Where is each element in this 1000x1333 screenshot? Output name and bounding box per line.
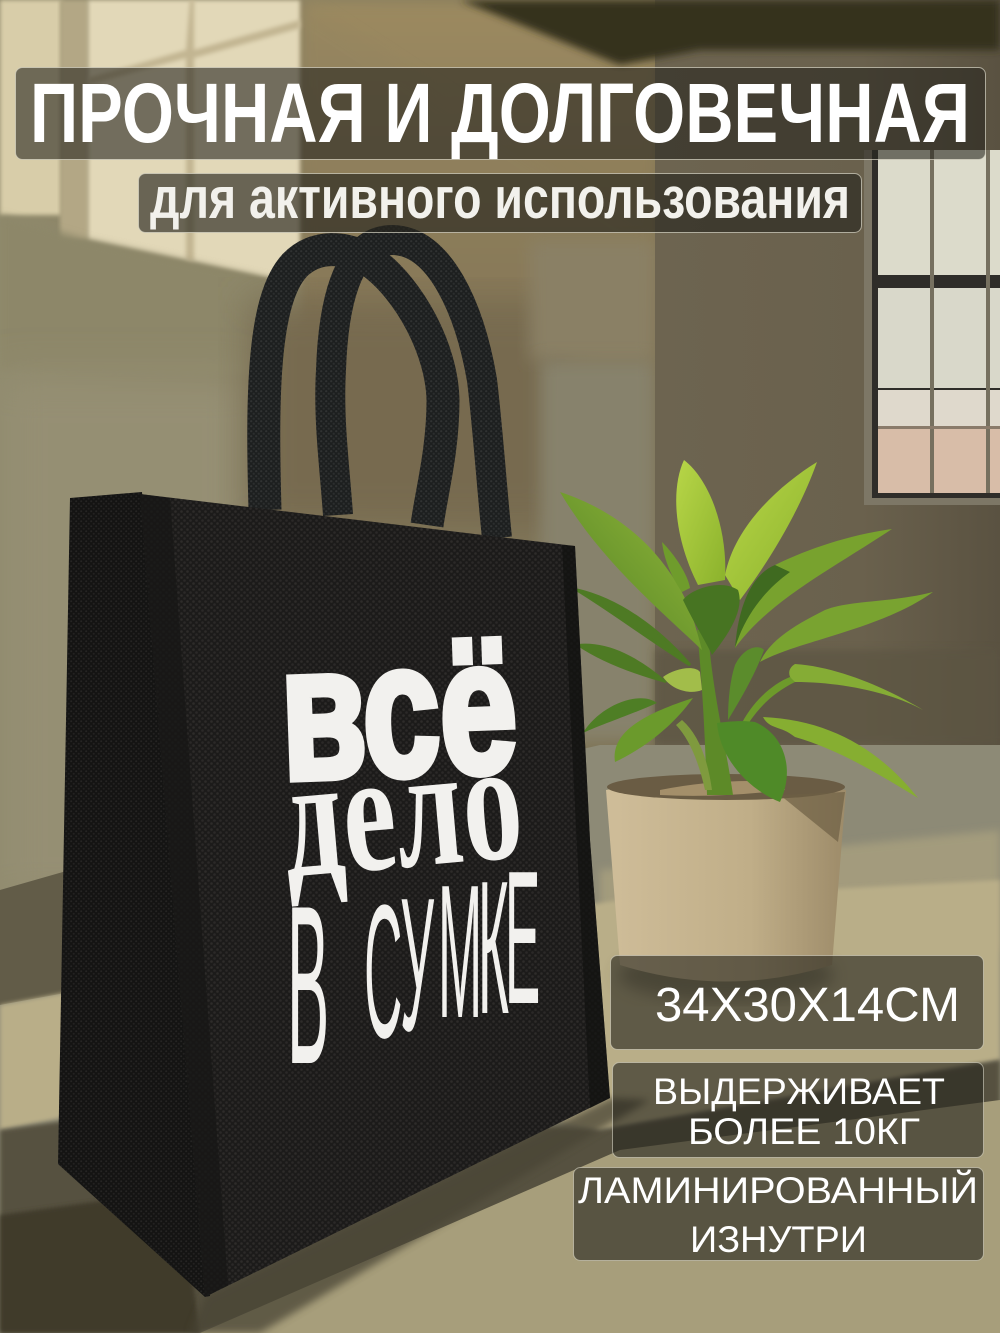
panel: load capacity: ВЫДЕРЖИВАЕТ <box>653 1071 945 1112</box>
bag slogan: дело <box>274 705 529 915</box>
bag slogan: всё <box>277 600 520 820</box>
bag side panel <box>58 492 210 1297</box>
subtitle panel: для активного использования <box>150 166 850 231</box>
tote bag <box>58 240 610 1297</box>
plant stem <box>697 630 733 795</box>
plant leaves <box>560 460 933 802</box>
panel: load capacity <box>612 1062 984 1158</box>
bag slogan: Е <box>505 831 540 1044</box>
bag slogan: М <box>438 845 482 1058</box>
bag slogan: В <box>287 860 347 1112</box>
bag handles <box>264 240 497 538</box>
panel: lamination <box>574 1168 984 1260</box>
floor <box>0 745 1000 1333</box>
plant pot <box>606 774 846 1001</box>
panel: dimensions <box>610 956 984 1050</box>
bag slogan: С <box>364 865 402 1078</box>
plant <box>560 460 933 802</box>
panel: load capacity: БОЛЕЕ 10КГ <box>688 1111 920 1152</box>
panel: dimensions: 34Х30Х14СМ <box>655 979 960 1032</box>
bag front panel <box>140 494 610 1297</box>
bag slogan: У <box>400 858 434 1071</box>
bag slogan <box>274 600 540 1112</box>
wall with sunlight <box>0 0 1000 905</box>
panel: lamination: ИЗНУТРИ <box>690 1219 867 1260</box>
window <box>864 150 1000 505</box>
bag slogan: К <box>478 841 509 1054</box>
panel: lamination: ЛАМИНИРОВАННЫЙ <box>578 1169 978 1211</box>
